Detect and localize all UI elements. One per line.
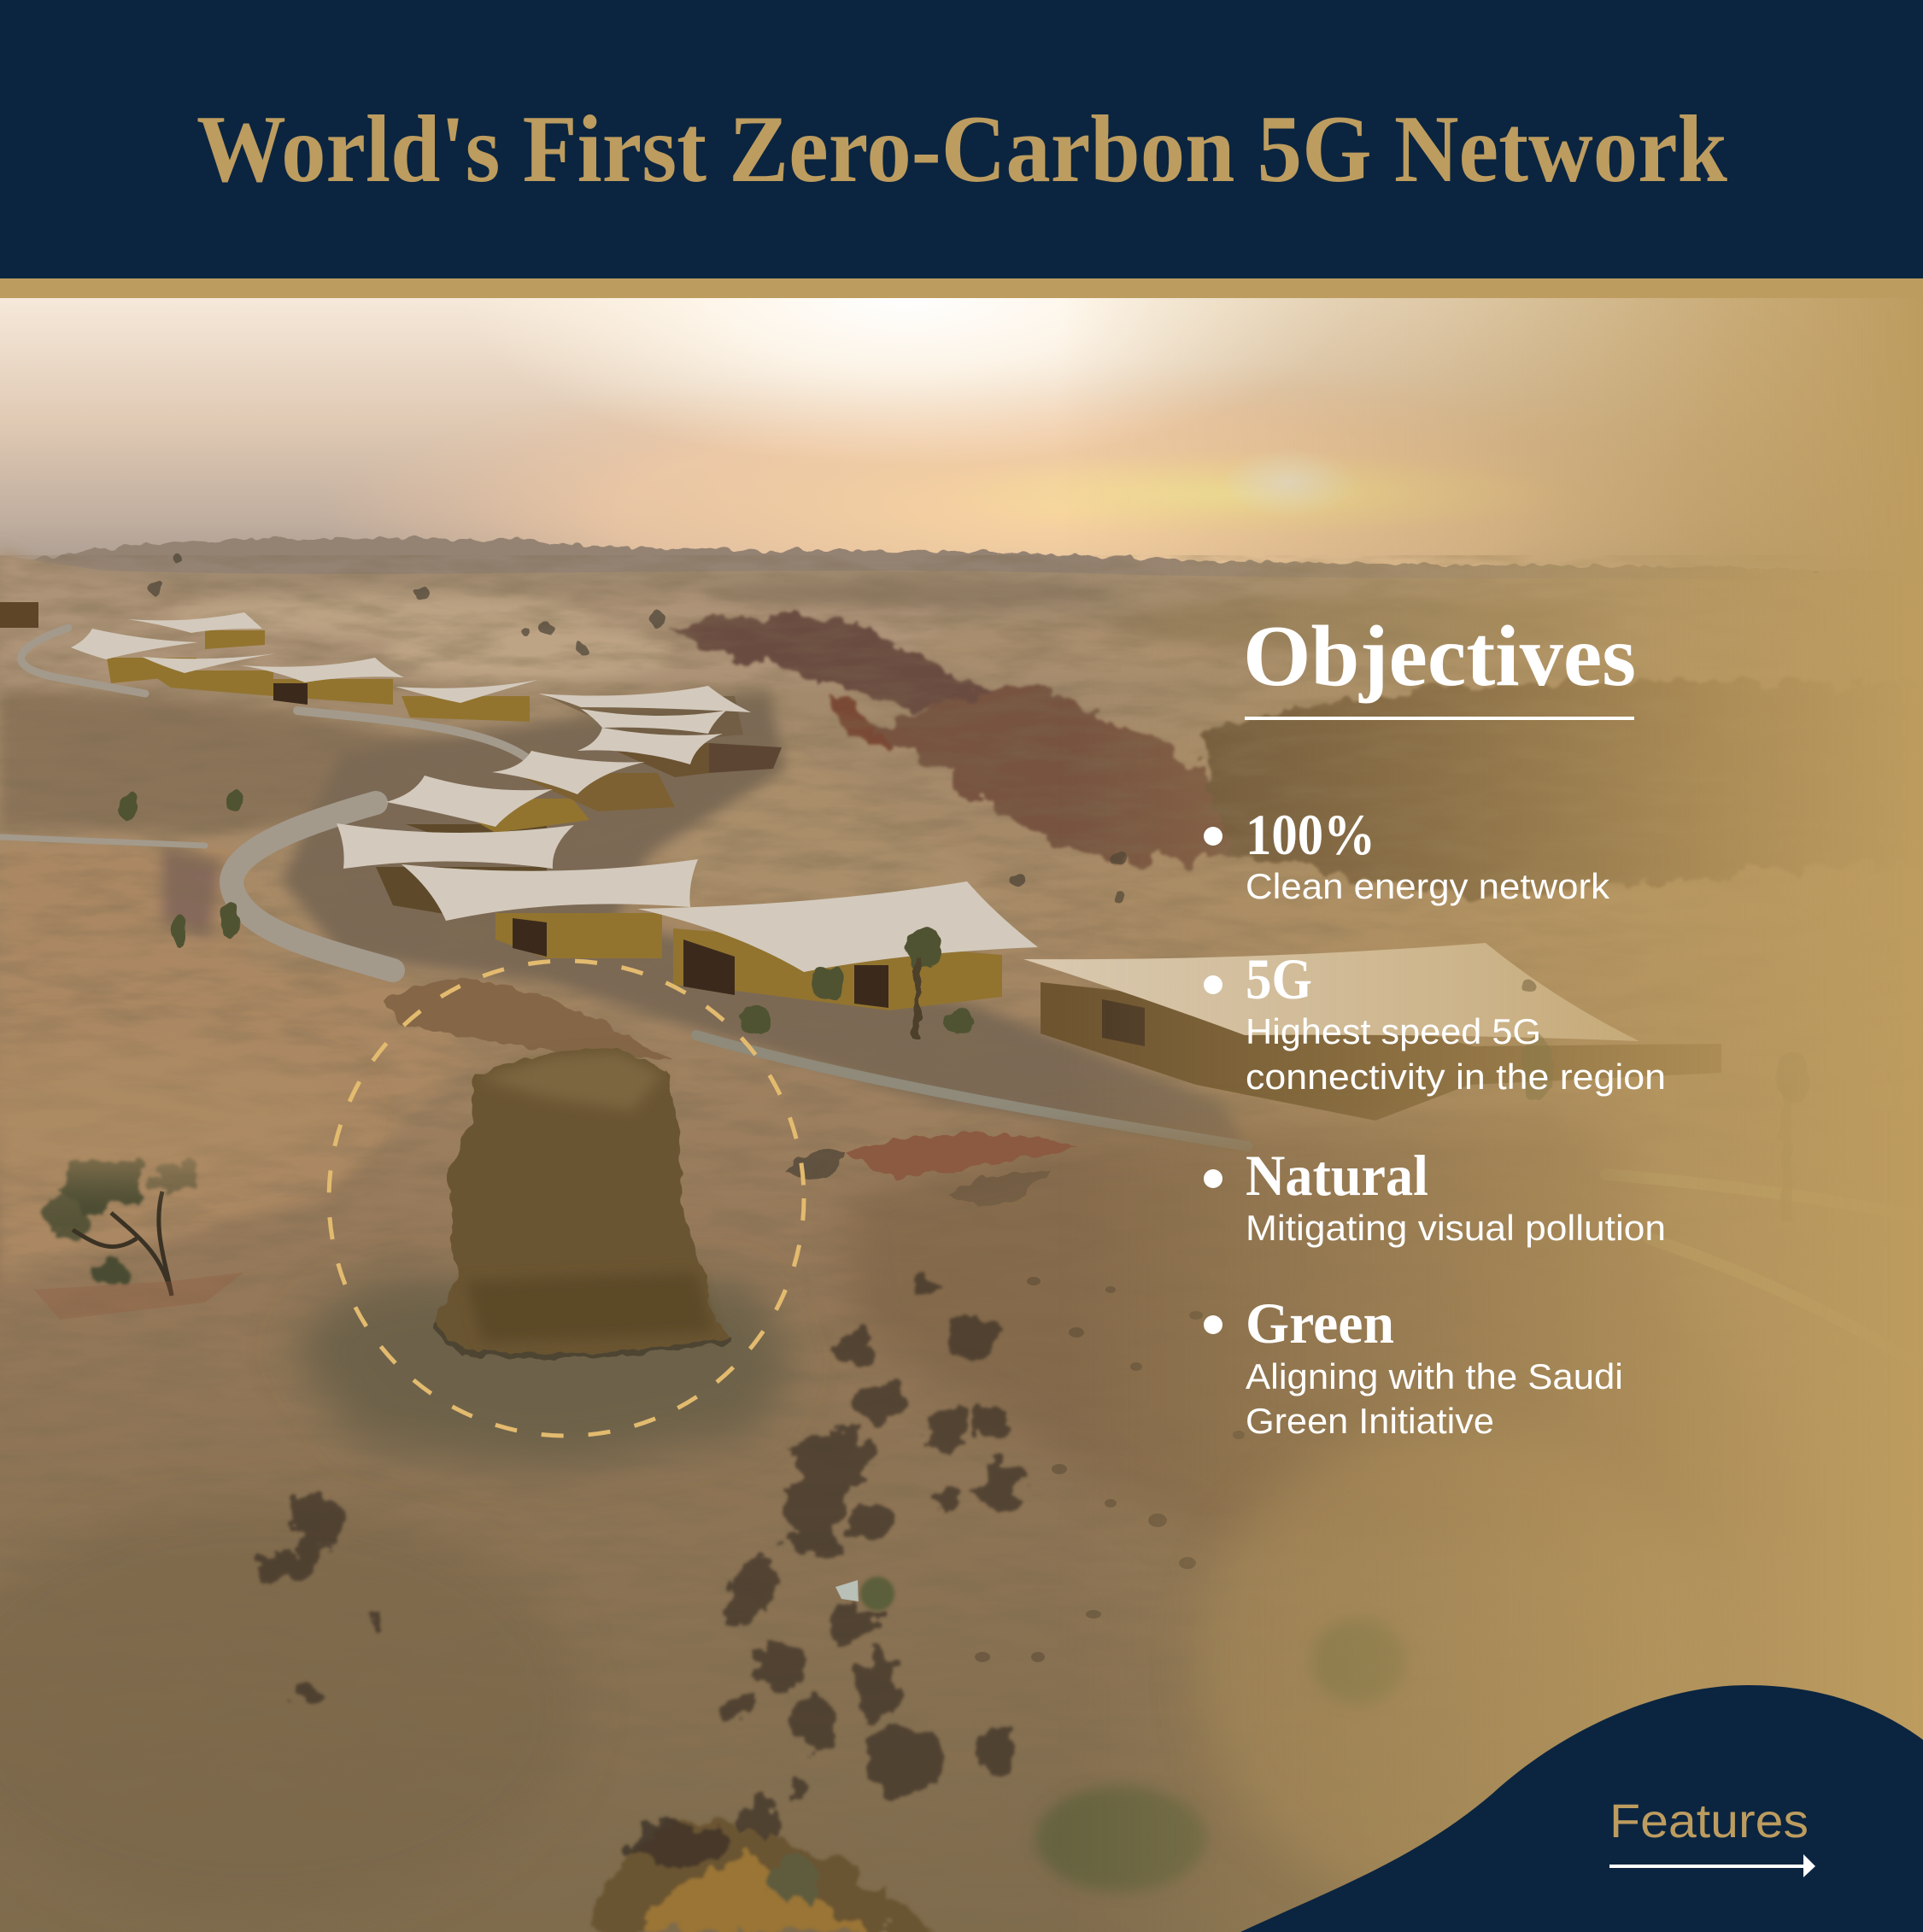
objective: 100%: 100% xyxy=(1246,802,1375,867)
access roads xyxy=(0,628,1923,1367)
sand ground xyxy=(0,555,1923,1932)
red rock hills xyxy=(671,617,1923,897)
navy wave corner xyxy=(1240,1685,1923,1932)
resort garden ground xyxy=(282,692,1247,1149)
greyish sand shade around monolith xyxy=(290,1276,794,1469)
objectives panel xyxy=(1204,608,1666,1441)
features label: Features xyxy=(1609,1794,1809,1847)
white debris patch xyxy=(835,1580,859,1601)
objective: Green: Aligning with the Saudi xyxy=(1246,1356,1623,1396)
objective: Green: Green Initiative xyxy=(1246,1401,1494,1441)
objectives heading: Objectives xyxy=(1243,608,1636,705)
sky xyxy=(0,298,1891,571)
gold divider xyxy=(0,278,1923,298)
objective: 5G: connectivity in the region xyxy=(1246,1057,1666,1097)
objective: 100%: Clean energy network xyxy=(1246,866,1610,906)
rock mound behind monolith xyxy=(384,981,675,1059)
right villa under gold wash xyxy=(1023,943,1721,1121)
heading underline xyxy=(1245,717,1634,720)
arrow xyxy=(1609,1854,1815,1877)
small stones on slope xyxy=(975,1277,1245,1662)
monolith shading xyxy=(466,1052,713,1343)
orange fence nets xyxy=(34,1273,243,1320)
dark rock clusters xyxy=(262,1275,1021,1840)
title: World's First Zero-Carbon 5G Network xyxy=(196,97,1728,202)
objective: 5G: Highest speed 5G xyxy=(1246,1011,1541,1051)
far mountain ridge xyxy=(30,535,1868,580)
left hillside xyxy=(0,692,1025,1281)
header band xyxy=(0,0,1923,278)
foreground boulder xyxy=(589,1815,931,1932)
villa door bands xyxy=(273,683,888,1008)
objective: Natural: Mitigating visual pollution xyxy=(1246,1208,1666,1248)
green shrub in rocks xyxy=(860,1577,894,1611)
villa walls xyxy=(0,602,1002,1010)
sandstone monolith xyxy=(431,1048,730,1356)
rust ridge and slope xyxy=(846,1119,1854,1546)
objective: 5G xyxy=(1204,946,1666,1097)
objective: 100% xyxy=(1204,802,1610,906)
objective: 5G: 5G xyxy=(1246,946,1312,1011)
slope tone shading xyxy=(0,1042,1709,1913)
trees and shrubs xyxy=(120,789,1809,1221)
foreground scrub xyxy=(1035,1619,1405,1892)
monolith base stones xyxy=(431,1326,730,1356)
objective: Green xyxy=(1204,1291,1623,1441)
dashed circle marker xyxy=(329,961,804,1436)
objective: Natural: Natural xyxy=(1246,1143,1428,1208)
villa roofs xyxy=(71,612,1038,972)
mid-distance dunes xyxy=(0,547,1623,683)
resort villas xyxy=(0,602,1721,1121)
dune texture xyxy=(0,555,1923,1932)
scattered dark scrub on dunes xyxy=(149,553,1536,1204)
objective: Green: Green xyxy=(1246,1291,1394,1355)
objective: Natural xyxy=(1204,1143,1666,1248)
acacia tree xyxy=(40,1152,199,1296)
